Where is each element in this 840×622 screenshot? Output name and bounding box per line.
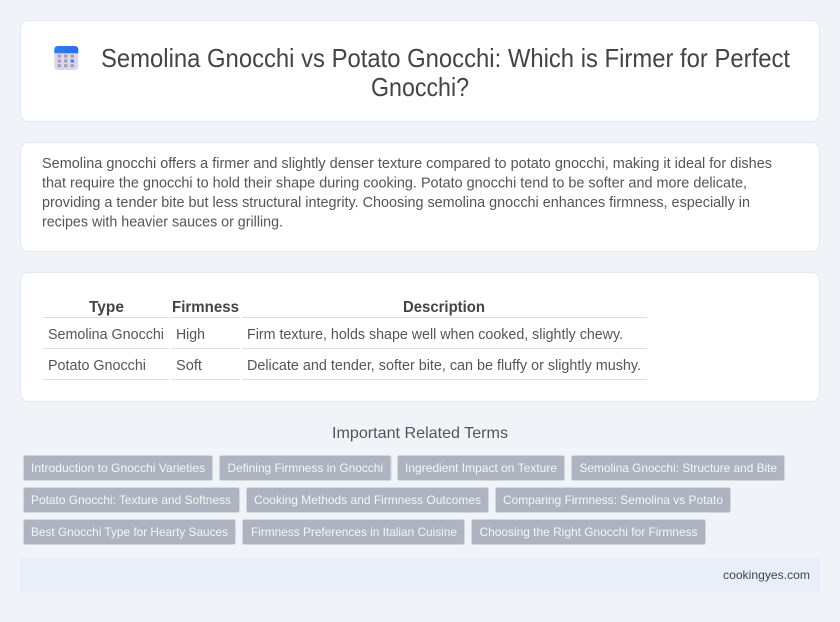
tag [220,456,391,480]
tag [242,520,464,544]
table header: Type [89,299,124,316]
tag: Defining Firmness in Gnocchi [228,461,383,475]
panel: title card [20,20,820,122]
text block: summary: Semolina gnocchi offers a firmer and slightly denser texture compared to potato gnocchi, making it ideal for dishes [42,156,772,172]
table header: Firmness [172,299,239,316]
tag [572,456,784,480]
tag: Firmness Preferences in Italian Cuisine [251,525,457,539]
table header [43,299,647,318]
table row: potato gnocchi: Soft [176,358,202,374]
text block: summary [42,156,772,230]
icon: calendar [54,46,78,70]
tag: Choosing the Right Gnocchi for Firmness [480,525,698,539]
tag: Best Gnocchi Type for Hearty Sauces [31,525,228,539]
table row: semolina gnocchi [43,327,647,348]
text block: summary: recipes with heavier sauces or grilling. [42,214,283,230]
text block: summary: that require the gnocchi to hold their shape during cooking. Potato gnocchi tend to be softer and more delicate, [42,176,747,192]
table header: Description [403,299,485,316]
table row: semolina gnocchi: High [176,327,205,343]
table row: semolina gnocchi: Firm texture, holds shape well when cooked, slightly chewy. [247,327,623,343]
heading: important related terms: Important Related Terms [332,425,508,442]
tag [496,488,730,512]
tag [24,520,236,544]
heading: title: Gnocchi? [371,74,469,102]
footer: cookingyes.com [723,568,810,582]
tag [398,456,564,480]
tag [246,488,488,512]
tag [24,456,212,480]
heading: title [101,45,790,102]
tag: Cooking Methods and Firmness Outcomes [254,493,481,507]
tag [472,520,706,544]
tag [24,488,240,512]
tag: Potato Gnocchi: Texture and Softness [31,493,231,507]
tag: Comparing Firmness: Semolina vs Potato [503,493,723,507]
tag: Introduction to Gnocchi Varieties [31,461,205,475]
tag: Semolina Gnocchi: Structure and Bite [580,461,777,475]
table row: potato gnocchi: Potato Gnocchi [48,358,146,374]
panel: comparison table [20,272,820,402]
tag: Ingredient Impact on Texture [405,461,557,475]
heading: title: Semolina Gnocchi vs Potato Gnocchi: Which is Firmer for Perfect [101,45,790,73]
table row: potato gnocchi [43,358,647,380]
panel: summary paragraph [20,142,820,252]
table row: semolina gnocchi: Semolina Gnocchi [48,327,164,343]
tag list: related terms [24,456,784,544]
table row: potato gnocchi: Delicate and tender, softer bite, can be fluffy or slightly mushy. [247,358,641,374]
footer [20,558,820,592]
text block: summary: providing a tender bite but less structural integrity. Choosing semolina gnocchi enhances firmness, especially in [42,195,750,211]
